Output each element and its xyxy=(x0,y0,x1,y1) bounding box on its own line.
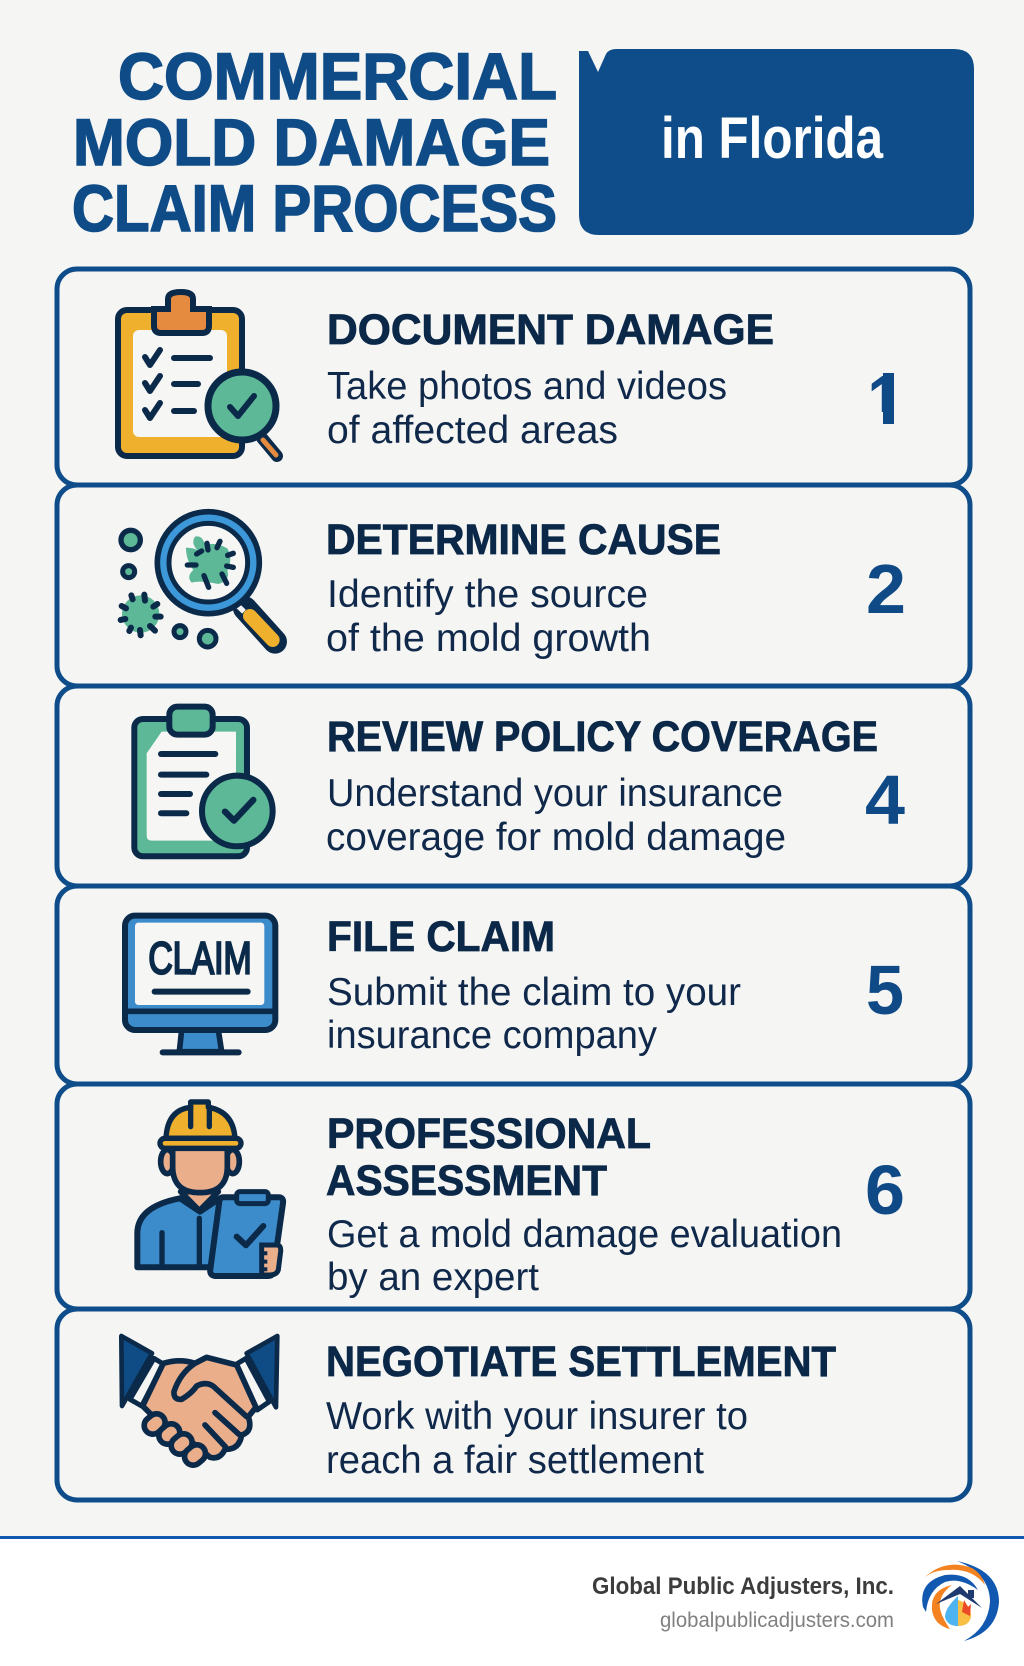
panel: step 6 negotiate settlement xyxy=(57,1309,970,1500)
icon: policy clipboard with check xyxy=(134,707,273,856)
description: Identify the source xyxy=(327,573,648,616)
description: Understand your insurance xyxy=(327,772,783,815)
panel: step 2 determine cause xyxy=(57,485,970,686)
panel: step 1 document damage xyxy=(57,269,970,485)
description xyxy=(327,971,741,1057)
icon: handshake xyxy=(121,1336,277,1469)
step number: 6 xyxy=(865,1151,905,1229)
icon: computer with claim screen xyxy=(125,916,275,1052)
company name: Global Public Adjusters, Inc. xyxy=(592,1573,894,1600)
description: Submit the claim to your xyxy=(327,971,741,1014)
heading: PROFESSIONAL xyxy=(327,1110,651,1158)
description: Get a mold damage evaluation xyxy=(327,1213,842,1256)
step number: 1 xyxy=(868,361,902,439)
description xyxy=(326,573,651,660)
description: of the mold growth xyxy=(326,617,651,660)
step number: 4 xyxy=(865,761,905,839)
heading: REVIEW POLICY COVERAGE xyxy=(327,713,878,761)
banner: in Florida: in Florida xyxy=(661,106,884,171)
description xyxy=(326,772,786,859)
description xyxy=(326,1395,748,1482)
heading: ASSESSMENT xyxy=(326,1157,607,1205)
heading: NEGOTIATE SETTLEMENT xyxy=(326,1338,836,1386)
panel: step 4 file claim xyxy=(57,886,970,1084)
banner: in Florida xyxy=(579,49,974,235)
description: reach a fair settlement xyxy=(326,1439,704,1482)
icon: computer with claim screen: CLAIM xyxy=(148,932,252,983)
heading: FILE CLAIM xyxy=(327,913,555,961)
heading xyxy=(326,1110,651,1205)
description: coverage for mold damage xyxy=(326,816,786,859)
description: by an expert xyxy=(327,1256,539,1299)
panel: step 5 professional assessment xyxy=(57,1084,970,1309)
heading: DOCUMENT DAMAGE xyxy=(327,306,774,354)
step number: 5 xyxy=(866,951,904,1029)
panel: step 3 review policy coverage xyxy=(57,686,970,886)
website: globalpublicadjusters.com xyxy=(660,1609,894,1632)
title xyxy=(72,39,557,245)
icon: company logo xyxy=(922,1561,999,1641)
heading: DETERMINE CAUSE xyxy=(326,516,721,564)
description xyxy=(327,365,727,452)
footer xyxy=(0,1536,1024,1666)
title: MOLD DAMAGE xyxy=(73,105,550,179)
icon: clipboard with checklist and magnifier xyxy=(118,292,277,456)
icon: magnifier over mold xyxy=(121,512,275,647)
step number: 2 xyxy=(866,550,906,628)
description: Take photos and videos xyxy=(327,365,727,408)
icon: inspector with hard hat and clipboard xyxy=(137,1102,283,1276)
title: CLAIM PROCESS xyxy=(72,171,557,245)
description xyxy=(327,1213,842,1299)
title: COMMERCIAL xyxy=(118,39,557,113)
description: Work with your insurer to xyxy=(326,1395,748,1438)
description: insurance company xyxy=(327,1014,657,1057)
description: of affected areas xyxy=(327,409,618,452)
